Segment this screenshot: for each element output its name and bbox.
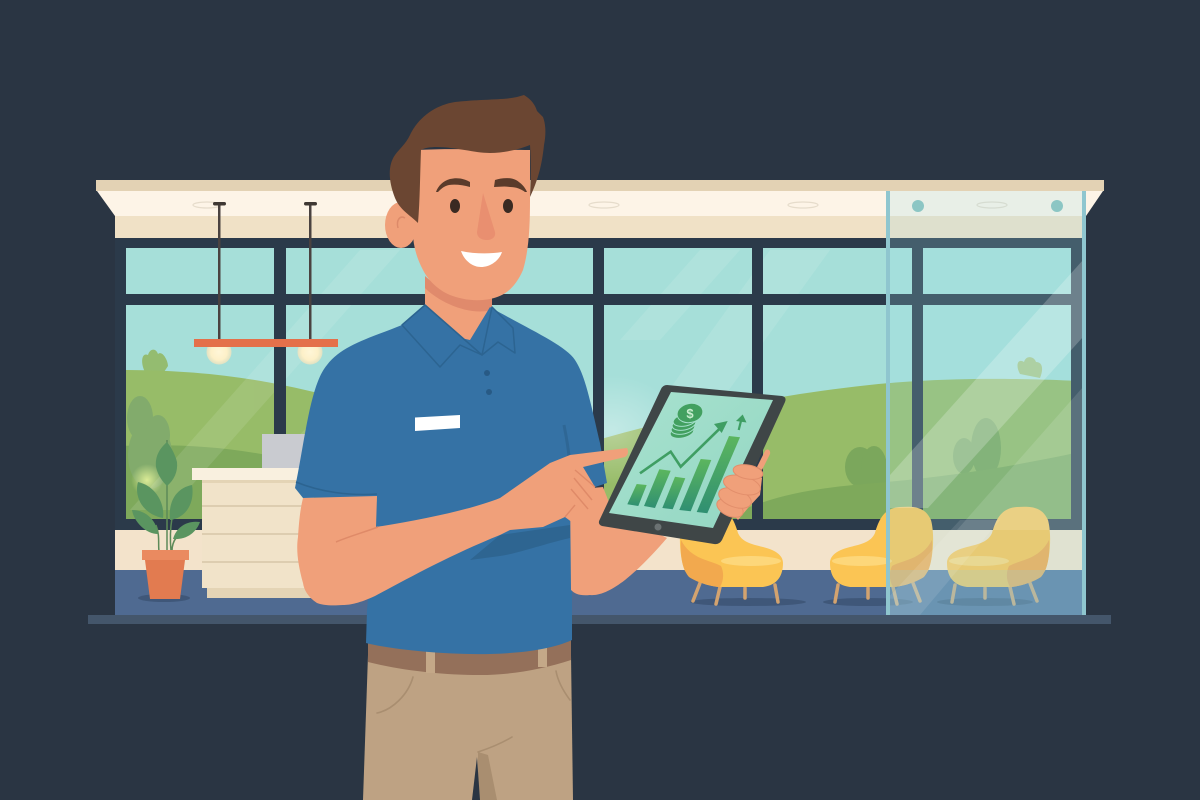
- tablet: $: [686, 406, 694, 421]
- hair: [390, 95, 545, 223]
- bushes behind plant: [127, 396, 172, 489]
- face: [413, 149, 530, 300]
- pointing arm and hand: [297, 448, 628, 605]
- eyes: [450, 199, 460, 213]
- collar right: [482, 307, 515, 355]
- polo shirt: [295, 307, 607, 654]
- chair middle: [823, 507, 933, 606]
- window view: sky and hills: [120, 240, 1080, 530]
- monitor: [262, 434, 306, 469]
- ear: [385, 202, 417, 248]
- chair left: [680, 507, 806, 606]
- wainscot wall: [115, 530, 1086, 570]
- bushes: [845, 418, 1001, 492]
- forearm shadow on shirt: [470, 525, 570, 560]
- potted plant: [132, 440, 200, 602]
- sleeve hem: [296, 482, 377, 494]
- head group: [385, 95, 545, 300]
- sleeve fold: [564, 425, 571, 490]
- pot: [145, 560, 185, 599]
- chair right: [937, 507, 1050, 606]
- belt: [368, 638, 571, 675]
- trouser pockets and creases: [377, 671, 570, 752]
- ceiling lights: [193, 202, 1007, 208]
- glass door panel: [886, 191, 1086, 615]
- distant shrub left: [142, 350, 168, 371]
- floor: [115, 570, 1086, 615]
- arm crease: [336, 527, 378, 542]
- gap between legs: [472, 757, 480, 800]
- man: [295, 95, 786, 800]
- hand holding tablet: [714, 450, 770, 521]
- glass reflections: [130, 250, 830, 519]
- coin stack: [669, 401, 705, 440]
- home button: [654, 524, 662, 530]
- eyebrows: [436, 178, 527, 192]
- small up arrow: [736, 414, 746, 430]
- nose: [477, 193, 495, 240]
- smile: [461, 251, 502, 267]
- finger lines: [565, 470, 595, 517]
- back hill: [126, 370, 1071, 508]
- roof strip: [96, 180, 1104, 191]
- collar left: [402, 305, 482, 367]
- trend arrow: [640, 421, 728, 473]
- reception desk: [192, 434, 317, 598]
- bar chart: [627, 436, 740, 513]
- tablet: [599, 385, 786, 544]
- fascia: [115, 216, 1086, 238]
- distant shrub right: [1017, 357, 1042, 378]
- name badge: [415, 415, 460, 431]
- front hill: [126, 446, 1071, 519]
- neck: [425, 280, 492, 358]
- shirt buttons: [484, 370, 492, 395]
- building: lobby storefront: [88, 180, 1111, 624]
- window frame: [115, 238, 1086, 530]
- floor ledge: [88, 615, 1111, 624]
- tablet arm: [570, 487, 667, 595]
- ceiling soffit: [97, 191, 1103, 216]
- pendant lamp: [194, 202, 338, 364]
- trousers: [363, 655, 573, 800]
